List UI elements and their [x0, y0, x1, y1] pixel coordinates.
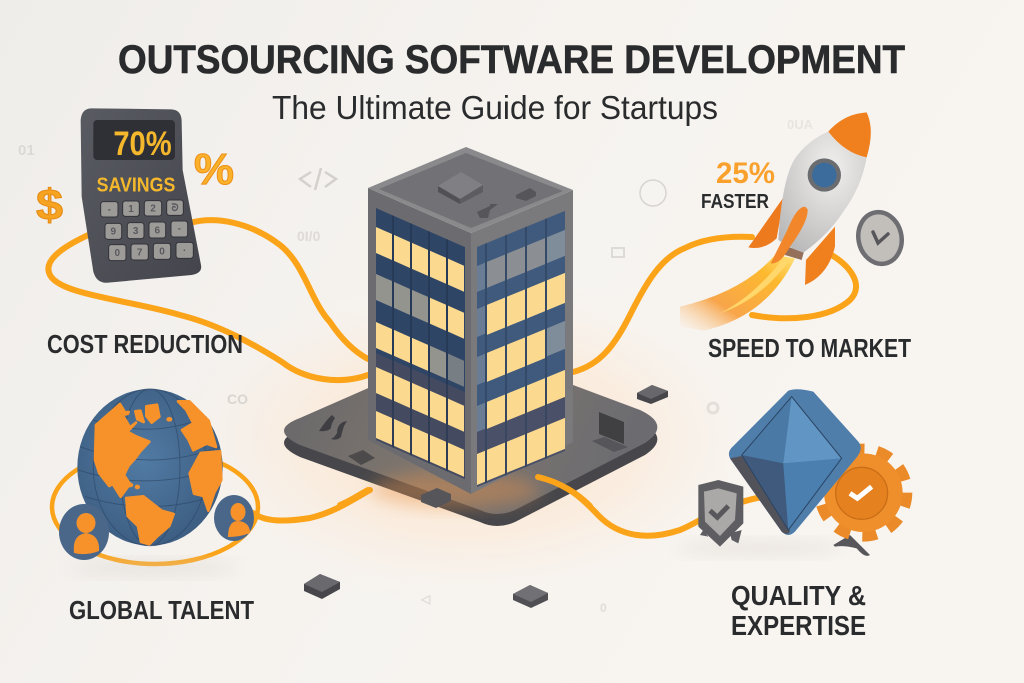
platform small objects [319, 412, 628, 508]
global talent panel [59, 389, 254, 625]
icon: calculator: 7 [137, 247, 143, 258]
icon: calculator: 2 [150, 204, 156, 215]
label: speed to market: SPEED TO MARKET [708, 333, 911, 363]
faint background marks: 0 [600, 601, 607, 615]
building roof [368, 147, 573, 233]
rocket flame [680, 255, 795, 331]
stat: 25% faster: FASTER [701, 191, 769, 213]
cost reduction panel [36, 108, 243, 359]
icon: calculator: 0 [159, 247, 165, 258]
faint background marks: 0UA [787, 117, 814, 132]
icon: shield [698, 480, 743, 547]
icon: diamond [729, 389, 861, 535]
wire ends on platform [340, 477, 590, 506]
roof unit [438, 172, 483, 204]
label: cost reduction: COST REDUCTION [47, 329, 243, 359]
small chip right of platform [637, 385, 668, 404]
shadow under icons [675, 540, 845, 556]
icon: calculator: - [178, 224, 181, 235]
building left wall [368, 188, 471, 494]
roof vents [477, 188, 536, 218]
title: OUTSOURCING SOFTWARE DEVELOPMENT [118, 38, 905, 82]
label: quality and expertise: EXPERTISE [731, 610, 866, 641]
stat: 25% faster [701, 157, 775, 213]
quality and expertise panel [675, 389, 905, 641]
icon: calculator: 3 [133, 226, 139, 237]
icon: calculator: 70% [113, 125, 172, 163]
icon: calculator: 6 [155, 225, 161, 236]
icon: rocket [680, 112, 871, 331]
shadow under globe [70, 560, 240, 576]
icon: calculator [81, 108, 201, 283]
icon: calculator: 9 [111, 227, 117, 238]
faint background marks [18, 117, 814, 615]
faint background marks: 0I/0 [297, 228, 321, 244]
icon: person left [59, 504, 109, 560]
icon: calculator: ᘐ [171, 202, 178, 214]
label: global talent: GLOBAL TALENT [69, 595, 254, 625]
warm light on platform [370, 472, 540, 508]
faint background marks: CO [227, 391, 248, 407]
speed to market panel [680, 112, 911, 363]
building platform [284, 345, 657, 526]
stat: 25% faster: 25% [716, 157, 775, 190]
icon: calculator: SAVINGS [97, 174, 175, 197]
icon: person right [214, 495, 254, 541]
icon: gear [822, 451, 905, 556]
subtitle: The Ultimate Guide for Startups [272, 89, 718, 126]
faint background marks: ◁ [420, 592, 431, 606]
icon: calculator: 0 [115, 248, 121, 259]
icon: percent sign: % [194, 145, 234, 194]
icon: clock [854, 208, 906, 268]
label: quality and expertise: QUALITY & [731, 580, 866, 611]
background glow [170, 275, 770, 605]
connector wires [48, 220, 856, 564]
icon: calculator: · [183, 245, 186, 256]
right window grid [477, 211, 565, 487]
icon: globe [77, 389, 223, 546]
small chip bottom right [513, 585, 548, 608]
building right wall [471, 190, 573, 494]
small chip bottom left [304, 574, 340, 599]
icon: calculator: 1 [128, 204, 134, 215]
icon: dollar sign: $ [36, 181, 63, 230]
left window grid [376, 208, 465, 479]
central office building [368, 147, 573, 494]
icon: calculator: - [108, 205, 111, 216]
faint background marks: 01 [18, 142, 35, 159]
label: quality and expertise [731, 580, 866, 641]
